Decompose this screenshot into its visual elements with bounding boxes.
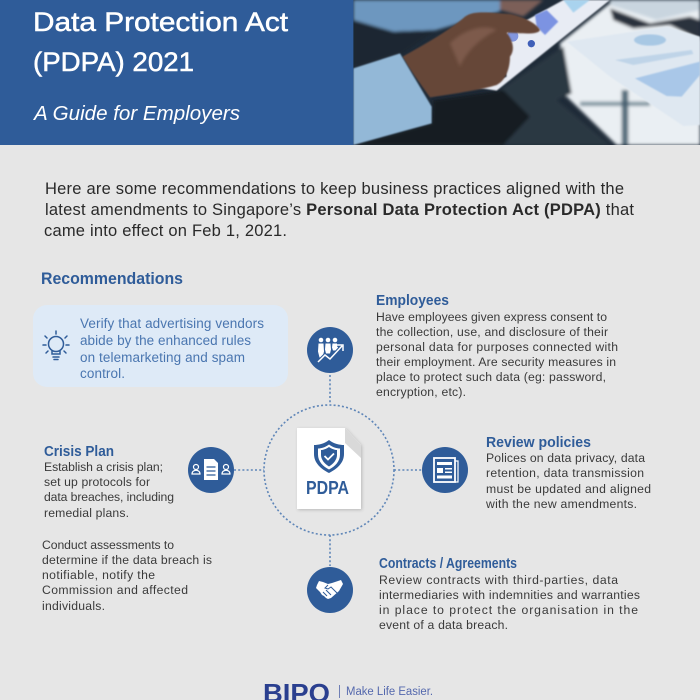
header banner bbox=[0, 0, 354, 145]
hand bbox=[403, 12, 540, 97]
text block: breach assessment bbox=[42, 538, 212, 613]
section: Employees: encryption, etc). bbox=[376, 385, 466, 399]
section: Employees: personal data for purposes connected with bbox=[376, 340, 618, 354]
section: Review policies: retention, data transmission bbox=[486, 466, 644, 480]
centre document: PDPA bbox=[297, 428, 361, 509]
document on table bbox=[567, 27, 700, 126]
callout text: control. bbox=[80, 366, 125, 381]
header photo: hand using tablet bbox=[353, 0, 700, 145]
section: Employees: their employment. Are security measures in bbox=[376, 355, 616, 369]
footer logo bbox=[263, 678, 433, 700]
callout text: Verify that advertising vendors bbox=[80, 316, 264, 331]
section: Contracts / Agreements bbox=[379, 556, 640, 632]
intro paragraph: latest amendments to Singapore’s Personal Data Protection Act (PDPA) that bbox=[45, 201, 634, 219]
diagram: connectors bbox=[234, 375, 423, 566]
intro paragraph: Here are some recommendations to keep business practices aligned with the bbox=[45, 180, 624, 198]
section: Employees: Have employees given express consent to bbox=[376, 310, 607, 324]
text block: breach assessment: determine if the data breach is bbox=[42, 553, 212, 567]
section: Employees bbox=[376, 293, 618, 399]
section: Review policies bbox=[485, 435, 651, 511]
text block: breach assessment: notifiable, notify the bbox=[42, 568, 155, 582]
icon: crisis plan document bbox=[188, 447, 234, 493]
icon: handshake bbox=[307, 567, 353, 613]
icon: light bulb bbox=[43, 331, 69, 360]
title: Data Protection Act bbox=[33, 7, 289, 37]
title: (PDPA) 2021 bbox=[33, 47, 194, 77]
section: Contracts / Agreements: Review contracts with third-parties, data bbox=[379, 573, 618, 587]
section: Employees: the collection, use, and disclosure of their bbox=[376, 325, 608, 339]
section: Review policies: Review policies bbox=[486, 435, 591, 451]
section: Employees: Employees bbox=[376, 293, 449, 309]
section: Contracts / Agreements: intermediaries with indemnities and warranties bbox=[379, 588, 640, 602]
section: Crisis Plan bbox=[44, 444, 174, 520]
section: Crisis Plan: data breaches, including bbox=[44, 490, 174, 504]
section: Review policies: Polices on data privacy, data bbox=[486, 451, 645, 465]
callout text: abide by the enhanced rules bbox=[80, 333, 251, 348]
tablet bbox=[476, 0, 610, 91]
panel: recommendation callout bbox=[33, 305, 288, 387]
subtitle: A Guide for Employers bbox=[33, 103, 240, 125]
PDPA label: PDPA bbox=[306, 478, 349, 498]
section: Crisis Plan: set up protocols for bbox=[44, 475, 150, 489]
callout text: on telemarketing and spam bbox=[80, 350, 245, 365]
section: Crisis Plan: Crisis Plan bbox=[44, 444, 114, 460]
text block: breach assessment: individuals. bbox=[42, 599, 105, 613]
intro paragraph: came into effect on Feb 1, 2021. bbox=[44, 222, 287, 240]
text block: breach assessment: Commission and affected bbox=[42, 583, 188, 597]
section: Employees: place to protect such data (eg: password, bbox=[376, 370, 606, 384]
icon: review policies newspaper bbox=[422, 447, 468, 493]
footer logo: Make Life Easier. bbox=[346, 686, 433, 698]
shirt cuff bbox=[353, 53, 432, 145]
section: Contracts / Agreements: Contracts / Agreements bbox=[379, 556, 517, 572]
icon: shield bbox=[314, 440, 344, 473]
section: Review policies: must be updated and aligned bbox=[486, 482, 651, 496]
section: Crisis Plan: remedial plans. bbox=[44, 506, 129, 520]
intro paragraph bbox=[44, 180, 634, 240]
section: Crisis Plan: Establish a crisis plan; bbox=[44, 460, 163, 474]
heading: Recommendations: Recommendations bbox=[41, 270, 183, 288]
section: Contracts / Agreements: event of a data breach. bbox=[379, 618, 508, 632]
title bbox=[33, 7, 289, 77]
callout text bbox=[80, 316, 264, 381]
section: Review policies: with the new amendments. bbox=[485, 497, 637, 511]
section: Contracts / Agreements: in place to protect the organisation in the bbox=[379, 603, 638, 617]
text block: breach assessment: Conduct assessments to bbox=[42, 538, 174, 552]
icon: employees growth bbox=[307, 327, 353, 373]
